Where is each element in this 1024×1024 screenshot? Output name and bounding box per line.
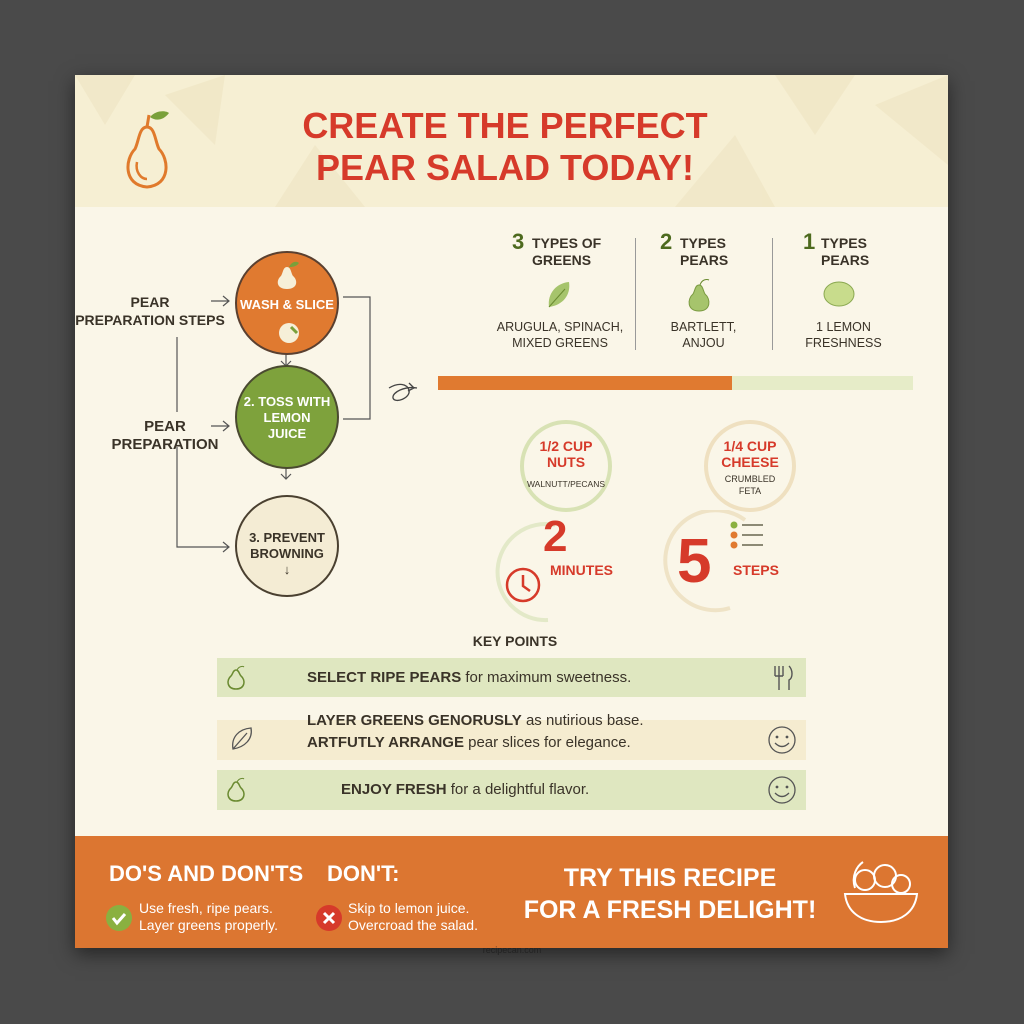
card xyxy=(75,75,948,948)
circle: toss with lemon juice: LEMON xyxy=(264,410,310,425)
circle: prevent browning xyxy=(235,495,339,597)
footer: Use fresh, ripe pears. xyxy=(139,900,273,916)
footer: Skip to lemon juice. xyxy=(348,900,469,916)
stat: lemon: 1 xyxy=(803,229,815,254)
footer xyxy=(75,836,948,948)
circle: cheese: CRUMBLED xyxy=(725,474,775,484)
circle: cheese: 1/4 CUP xyxy=(724,438,776,454)
key points heading: KEY POINTS xyxy=(473,633,557,649)
stat: 5 steps: STEPS xyxy=(733,562,779,578)
header band xyxy=(75,75,948,207)
footer: Layer greens properly. xyxy=(139,917,278,933)
key point row 2: LAYER GREENS GENORUSLY as nutirious base. xyxy=(307,712,644,729)
stat: lemon: PEARS xyxy=(821,252,869,268)
stat: greens: GREENS xyxy=(532,252,591,268)
stat: greens xyxy=(512,229,601,268)
stats: types xyxy=(496,229,882,350)
flow: left labels: PEAR xyxy=(131,294,169,310)
circle: cheese: FETA xyxy=(739,486,761,496)
stat: lemon xyxy=(803,229,869,268)
flow connectors xyxy=(176,296,418,552)
footer: Overcroad the salad. xyxy=(348,917,478,933)
call to action: FOR A FRESH DELIGHT! xyxy=(524,896,816,924)
don'ts: DON'T: xyxy=(327,861,399,886)
stat: greens: 3 xyxy=(512,229,524,254)
stat: 2 minutes xyxy=(496,512,613,622)
stat: greens: TYPES OF xyxy=(532,235,601,251)
arrow: squiggle xyxy=(389,383,417,400)
stats: types: 1 LEMON xyxy=(816,320,871,334)
circle: nuts: WALNUTT/PECANS xyxy=(527,479,605,489)
stat: 2 minutes: 2 xyxy=(543,512,567,561)
key point row 2: ARTFUTLY ARRANGE pear slices for elegance. xyxy=(307,734,631,751)
card: PEAR xyxy=(144,418,186,435)
circle: nuts: 1/2 CUP xyxy=(540,438,592,454)
progress bar xyxy=(438,376,913,390)
circle: wash & slice: WASH & SLICE xyxy=(240,297,334,312)
flow: left labels xyxy=(75,294,225,328)
circle: wash & slice xyxy=(235,251,339,355)
stats: types: ARUGULA, SPINACH, xyxy=(497,320,623,334)
stat: 2 minutes: MINUTES xyxy=(550,562,613,578)
stats: types: MIXED GREENS xyxy=(512,336,608,350)
key point row 2 xyxy=(217,720,806,760)
circle: prevent browning: 3. PREVENT xyxy=(249,530,325,545)
title: PEAR SALAD TODAY! xyxy=(316,147,694,188)
circle: prevent browning: BROWNING xyxy=(250,546,324,561)
watermark: recipecan.com xyxy=(483,945,541,955)
title xyxy=(302,105,708,188)
stat: pears: PEARS xyxy=(680,252,728,268)
key point row 3: ENJOY FRESH for a delightful flavor. xyxy=(341,781,589,798)
stat: pears: 2 xyxy=(660,229,672,254)
title: CREATE THE PERFECT xyxy=(302,105,708,146)
circle: cheese xyxy=(704,420,796,512)
icon: salad bowl xyxy=(844,861,918,923)
circle: toss with lemon juice: 2. TOSS WITH xyxy=(244,394,330,409)
key point row 3 xyxy=(217,770,806,810)
call to action: TRY THIS RECIPE xyxy=(564,864,776,892)
circle: nuts xyxy=(520,420,612,512)
card: PREPARATION xyxy=(112,436,218,453)
stat: pears: TYPES xyxy=(680,235,726,251)
circle: cheese: CHEESE xyxy=(721,454,779,470)
circle: nuts: NUTS xyxy=(547,454,585,470)
stat: pears xyxy=(660,229,728,268)
flow: left labels: PREPARATION STEPS xyxy=(75,312,225,328)
stat: 5 steps: 5 xyxy=(677,527,711,596)
stat: 5 steps xyxy=(663,510,779,612)
stat: lemon: TYPES xyxy=(821,235,867,251)
circle: toss with lemon juice xyxy=(235,365,339,469)
circle: prevent browning: ↓ xyxy=(284,562,290,577)
icon: pear logo xyxy=(126,111,169,188)
key point row 1: SELECT RIPE PEARS for maximum sweetness. xyxy=(307,669,631,686)
circle: toss with lemon juice: JUICE xyxy=(268,426,306,441)
stats: types: BARTLETT, xyxy=(671,320,736,334)
do's: DO'S AND DON'TS xyxy=(109,861,303,886)
call to action xyxy=(524,864,816,924)
stats: types: ANJOU xyxy=(682,336,725,350)
stats: types: FRESHNESS xyxy=(805,336,882,350)
key point row 1 xyxy=(217,658,806,697)
